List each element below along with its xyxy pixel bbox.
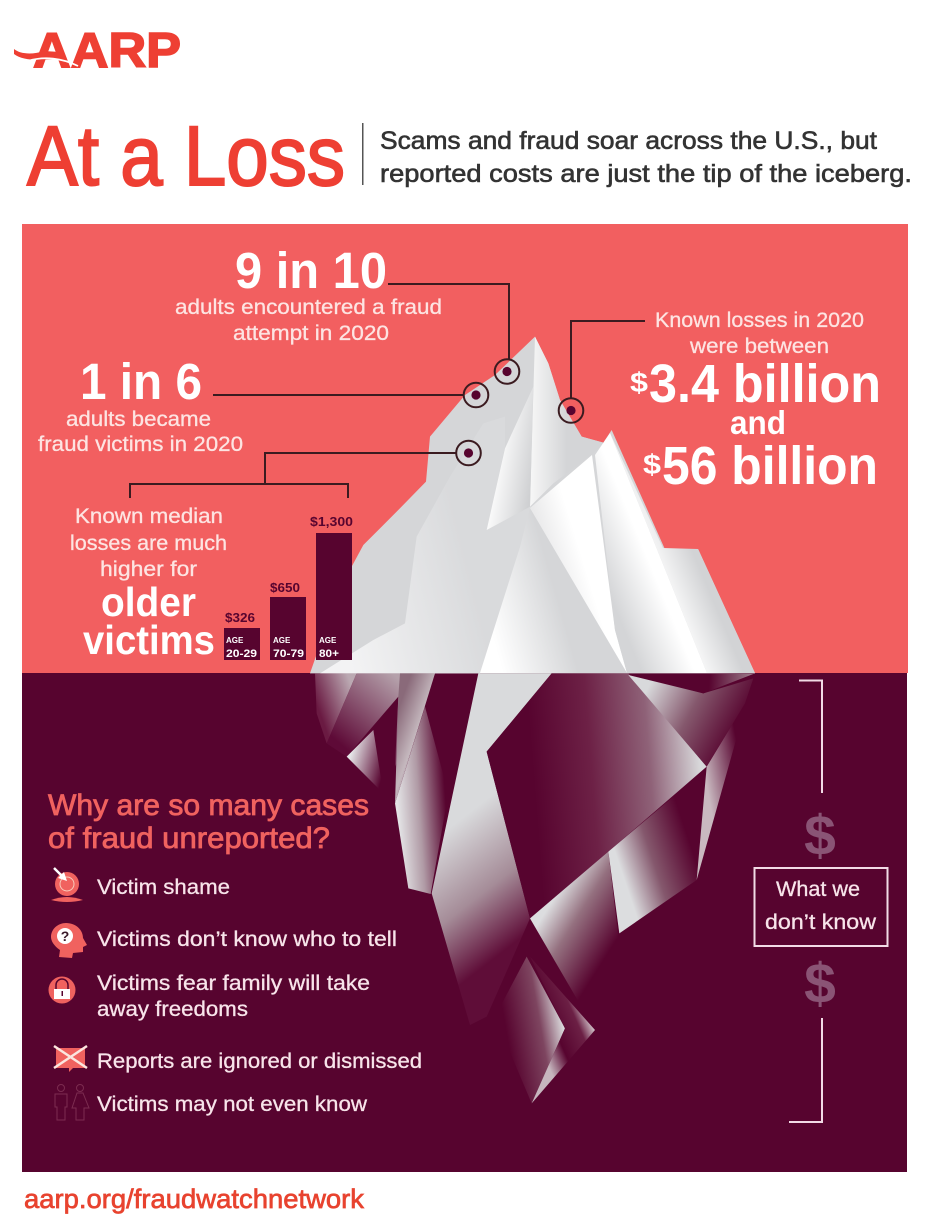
leader lines and target markers xyxy=(130,284,645,498)
what we don't know marker: $ xyxy=(804,952,836,1016)
what we don't know marker: $ xyxy=(804,804,836,868)
heading: why unreported xyxy=(48,789,369,855)
callout: known losses: $ xyxy=(630,367,648,398)
what we don't know marker: don’t know xyxy=(765,911,877,934)
bar chart: median losses by age xyxy=(224,515,353,660)
footer url: aarp.org/fraudwatchnetwork xyxy=(24,1184,364,1214)
callout: known losses: were between xyxy=(689,335,829,358)
iceberg underwater xyxy=(315,673,753,1103)
callout: 9 in 10: 9 in 10 xyxy=(235,242,387,299)
subtitle: reported costs are just the tip of the iceberg. xyxy=(380,160,912,188)
callout: known losses: 3.4 billion xyxy=(649,354,881,414)
bar chart: median losses by age: $326 xyxy=(225,611,255,625)
bar chart: median losses by age: AGE xyxy=(226,636,244,645)
callout: known losses xyxy=(630,309,881,496)
reasons list: Victims don’t know who to tell xyxy=(97,928,397,951)
subtitle xyxy=(380,127,912,188)
callout: 1 in 6 xyxy=(38,353,243,456)
older victims text: victims xyxy=(83,617,215,663)
callout: 1 in 6: 1 in 6 xyxy=(80,353,202,410)
bar chart: median losses by age: 80+ xyxy=(319,648,339,660)
older victims text: higher for xyxy=(100,558,197,581)
bar chart: median losses by age: 70-79 xyxy=(273,648,304,660)
heading: why unreported: Why are so many cases xyxy=(48,789,369,822)
reasons list: Victims fear family will take xyxy=(97,972,370,995)
icon: question head xyxy=(51,923,87,958)
bar chart: median losses by age: $1,300 xyxy=(310,515,353,529)
older victims text: Known median xyxy=(75,505,223,528)
title: At a Loss xyxy=(27,109,345,203)
icon: target head xyxy=(51,868,83,902)
callout: 9 in 10: attempt in 2020 xyxy=(233,322,389,345)
panel: above water xyxy=(22,224,908,673)
older victims text xyxy=(70,505,227,663)
reasons list: Victim shame xyxy=(97,876,230,899)
heading: why unreported: of fraud unreported? xyxy=(48,822,330,855)
panel: below water xyxy=(22,673,907,1172)
callout: known losses: 56 billion xyxy=(662,436,878,496)
icon: man and woman xyxy=(55,1084,89,1120)
AARP logo: AARP xyxy=(33,24,181,78)
callout: 1 in 6: fraud victims in 2020 xyxy=(38,433,243,456)
reasons list: Reports are ignored or dismissed xyxy=(97,1050,422,1073)
callout: known losses: and xyxy=(730,404,786,441)
bar chart: median losses by age: $650 xyxy=(270,581,300,595)
callout: 1 in 6: adults became xyxy=(66,408,211,431)
bar chart: median losses by age: AGE xyxy=(319,636,337,645)
what we don't know marker: What we xyxy=(776,878,860,901)
what we don't know marker xyxy=(754,680,888,1122)
icon: padlock xyxy=(48,976,76,1004)
older victims text: older xyxy=(101,579,196,625)
icon: question head: ? xyxy=(61,928,69,944)
subtitle: Scams and fraud soar across the U.S., but xyxy=(380,127,877,155)
callout: 9 in 10 xyxy=(175,242,442,345)
callout: known losses: Known losses in 2020 xyxy=(655,309,864,332)
reasons list: away freedoms xyxy=(97,998,248,1021)
reasons list: Victims may not even know xyxy=(97,1093,368,1116)
iceberg tip xyxy=(310,337,755,673)
older victims text: losses are much xyxy=(70,532,227,555)
bar chart: median losses by age: AGE xyxy=(273,636,291,645)
callout: known losses: $ xyxy=(643,449,661,480)
callout: 9 in 10: adults encountered a fraud xyxy=(175,296,442,319)
reasons list xyxy=(97,876,422,1116)
icon: crossed-out speech bubble xyxy=(54,1046,87,1072)
bar chart: median losses by age: 20-29 xyxy=(226,648,257,660)
